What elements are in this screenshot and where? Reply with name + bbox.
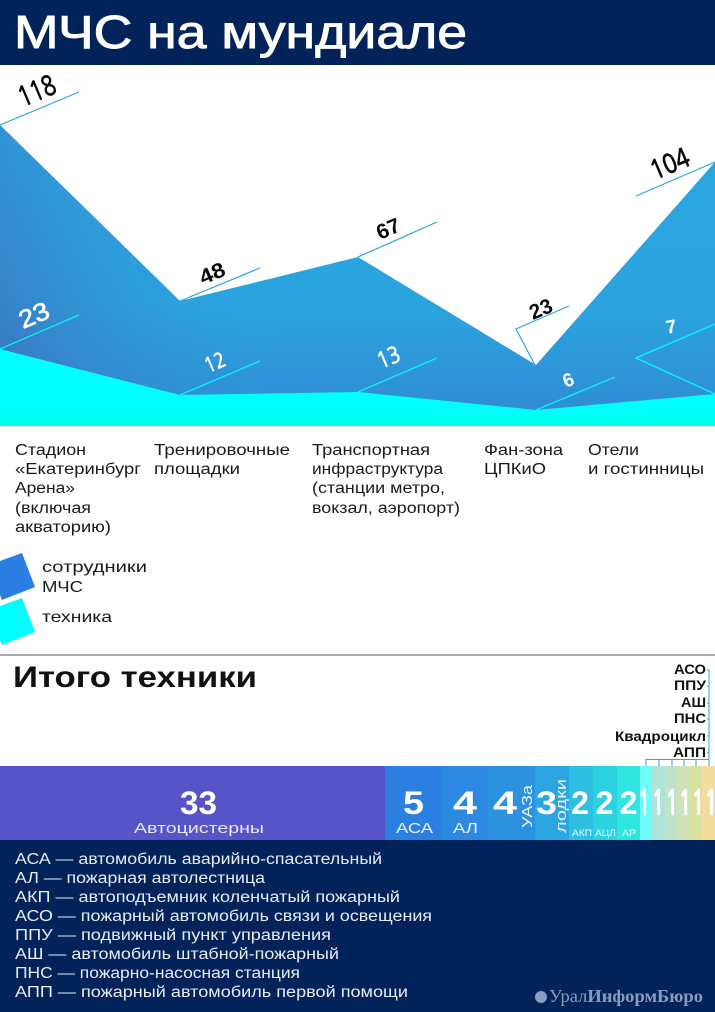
label: transport: вокзал, аэропорт): [312, 500, 460, 517]
glossary text: АКП — автоподъемник коленчатый пожарный: [15, 889, 400, 906]
segments: single units: 1: [692, 787, 704, 819]
segment: ACL: 2: [596, 785, 613, 821]
segments: single units: 1: [638, 787, 650, 819]
small vehicle labels with leaders: АШ: [681, 695, 706, 710]
legend: [0, 553, 147, 645]
small vehicle labels with leaders: АПП: [673, 745, 706, 760]
legend text: equipment: техника: [42, 609, 112, 626]
staff values: 23: [526, 294, 556, 325]
label: transport: инфраструктура: [312, 461, 443, 478]
label: stadium: Арена»: [15, 480, 75, 497]
label: transport: Транспортная: [312, 442, 430, 459]
segment: tankers: 33: [180, 785, 217, 821]
label: fan zone: ЦПКиО: [484, 461, 546, 478]
staff values: 48: [196, 258, 229, 290]
legend icon: equipment: [0, 598, 35, 645]
glossary panel: [0, 840, 715, 1012]
staff values: 104: [646, 144, 693, 184]
location labels: [15, 442, 704, 536]
small vehicle labels with leaders: ПНС: [674, 711, 706, 726]
staff values: 67: [373, 214, 404, 245]
segments: single units: [638, 766, 715, 840]
label: stadium: (включая: [15, 500, 91, 517]
stacked bar: vehicles total: [0, 766, 715, 840]
label: fan zone: Фан-зона: [484, 442, 563, 459]
segment: AR: [617, 766, 640, 840]
small vehicle labels with leaders: АСО: [674, 662, 706, 677]
glossary text: ППУ — подвижный пункт управления: [15, 927, 331, 944]
segments: single units: 1: [666, 787, 678, 819]
small vehicle labels with leaders: Квадроцикл: [615, 729, 706, 744]
small vehicle labels with leaders: [615, 662, 709, 766]
segment: boats: [535, 766, 570, 840]
segment: UAZ: УАЗа: [519, 784, 536, 828]
title banner: [0, 0, 715, 65]
glossary text: АЛ — пожарная автолестница: [15, 870, 265, 887]
segment: AKP: 2: [571, 785, 589, 821]
label: stadium: акваторию): [15, 519, 111, 536]
glossary text: АПП — пожарный автомобиль первой помощи: [15, 984, 408, 1001]
glossary text: [15, 851, 432, 1001]
legend text: staff: сотрудники: [42, 559, 147, 576]
title: МЧС на мундиале: [14, 6, 467, 58]
segment: AR: 2: [620, 785, 637, 821]
segment: ACL: АЦЛ: [595, 828, 616, 839]
watermark: УралИнформБюро: [549, 986, 703, 1006]
staff values: [0, 71, 715, 365]
segments: single units: 1: [652, 787, 664, 819]
equipment values: [0, 297, 715, 410]
segment: AL: 4: [453, 785, 477, 821]
label: training grounds: Тренировочные: [154, 442, 290, 459]
segment: UAZ: [488, 766, 536, 840]
area: staff: [0, 125, 715, 426]
segment: tankers: [0, 766, 385, 840]
glossary text: АСА — автомобиль аварийно-спасательный: [15, 851, 382, 868]
equipment values: 23: [14, 297, 54, 335]
label: stadium: «Екатеринбург: [15, 461, 141, 478]
segment: AL: АЛ: [453, 820, 478, 837]
label: hotels: и гостинницы: [588, 461, 704, 478]
segment: AKP: АКП: [572, 828, 592, 839]
area: equipment: [0, 349, 715, 426]
glossary text: АСО — пожарный автомобиль связи и освещения: [15, 908, 432, 925]
equipment values: 6: [560, 369, 578, 393]
segment: ASA: [385, 766, 442, 840]
segment: ASA: 5: [403, 785, 424, 821]
area chart: staff and equipment by location: [0, 71, 715, 426]
small vehicle labels with leaders: ППУ: [674, 678, 707, 693]
segment: boats: 3: [536, 785, 557, 821]
label: stadium: Стадион: [15, 442, 86, 459]
label: hotels: Отели: [588, 442, 639, 459]
section heading: Итого техники: [13, 661, 257, 694]
segment: AR: АР: [622, 828, 636, 839]
segment: UAZ: 4: [493, 785, 517, 821]
legend icon: staff: [0, 553, 35, 600]
segment: AL: [442, 766, 488, 840]
legend text: staff: МЧС: [42, 579, 83, 596]
glossary text: АШ — автомобиль штабной-пожарный: [15, 946, 339, 963]
segment: ACL: [593, 766, 617, 840]
label: training grounds: площадки: [154, 461, 240, 478]
glossary text: ПНС — пожарно-насосная станция: [15, 965, 300, 982]
segment: AKP: [569, 766, 593, 840]
label: transport: (станции метро,: [312, 480, 445, 497]
segment: ASA: АСА: [396, 820, 433, 837]
equipment values: 7: [664, 316, 678, 339]
staff values: 118: [14, 71, 60, 111]
segments: single units: 1: [679, 787, 691, 819]
equipment values: 12: [201, 349, 229, 376]
segment: boats: лодки: [553, 779, 570, 833]
segment: tankers: Автоцистерны: [134, 820, 264, 837]
equipment values: 13: [374, 343, 404, 373]
